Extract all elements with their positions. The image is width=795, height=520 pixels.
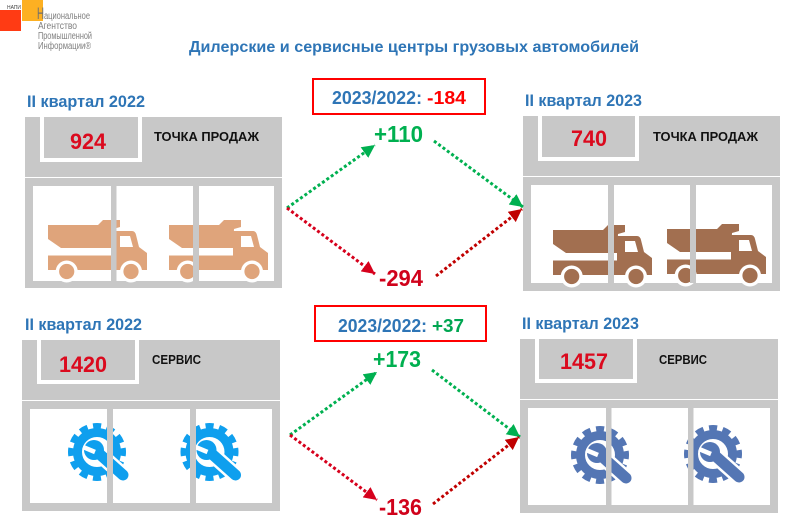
heading: sales 2022: II квартал 2022 <box>27 93 145 111</box>
heading: sales 2023: II квартал 2023 <box>525 92 642 110</box>
panel: service Q2 2022 <box>22 316 280 511</box>
panel: sales points Q2 2022 <box>25 93 282 288</box>
icon: truck <box>169 220 268 282</box>
label: service: СЕРВИС <box>152 353 201 367</box>
icon: gear and wrench <box>574 429 626 481</box>
icon: truck <box>553 225 652 288</box>
value: sales decrease: -294 <box>379 265 423 291</box>
label: sales point: ТОЧКА ПРОДАЖ <box>653 130 759 144</box>
icon: truck <box>48 220 147 282</box>
panel: sales points Q2 2023 <box>523 92 780 291</box>
callout: sales change: 2023/2022: <box>332 87 422 108</box>
logo <box>0 0 92 52</box>
title: Дилерские и сервисные центры грузовых автомобилей <box>189 39 639 56</box>
callout: sales change <box>313 79 485 114</box>
icon: truck <box>667 224 766 286</box>
heading: service 2022: II квартал 2022 <box>25 316 142 334</box>
callout: service change: +37 <box>432 315 464 336</box>
value: 1457: 1457 <box>560 349 608 374</box>
value: service increase: +173 <box>373 346 421 372</box>
icon: gear and wrench <box>184 426 236 478</box>
icon: gear and wrench <box>687 428 739 480</box>
value: 740: 740 <box>571 126 607 151</box>
logo: НАПИ <box>7 5 21 11</box>
label: sales point: ТОЧКА ПРОДАЖ <box>154 130 260 144</box>
logo: Промышленной <box>38 31 92 42</box>
value: sales increase: +110 <box>374 121 423 147</box>
value: service decrease: -136 <box>379 494 422 520</box>
logo: ациональное <box>44 11 90 22</box>
label: service: СЕРВИС <box>659 353 707 367</box>
logo: Н <box>37 4 44 23</box>
callout: service change: 2023/2022: <box>338 315 427 336</box>
value: 1420: 1420 <box>59 352 107 377</box>
logo: Информации® <box>38 40 91 52</box>
heading: service 2023: II квартал 2023 <box>522 315 639 333</box>
arrows: sales flow <box>287 141 523 276</box>
logo: Агентство <box>38 21 77 32</box>
callout: sales change: -184 <box>427 87 467 108</box>
value: 924: 924 <box>70 129 107 154</box>
arrows: service flow <box>290 370 520 504</box>
callout: service change <box>315 306 486 341</box>
icon: gear and wrench <box>71 426 123 478</box>
panel: service Q2 2023 <box>520 315 778 513</box>
